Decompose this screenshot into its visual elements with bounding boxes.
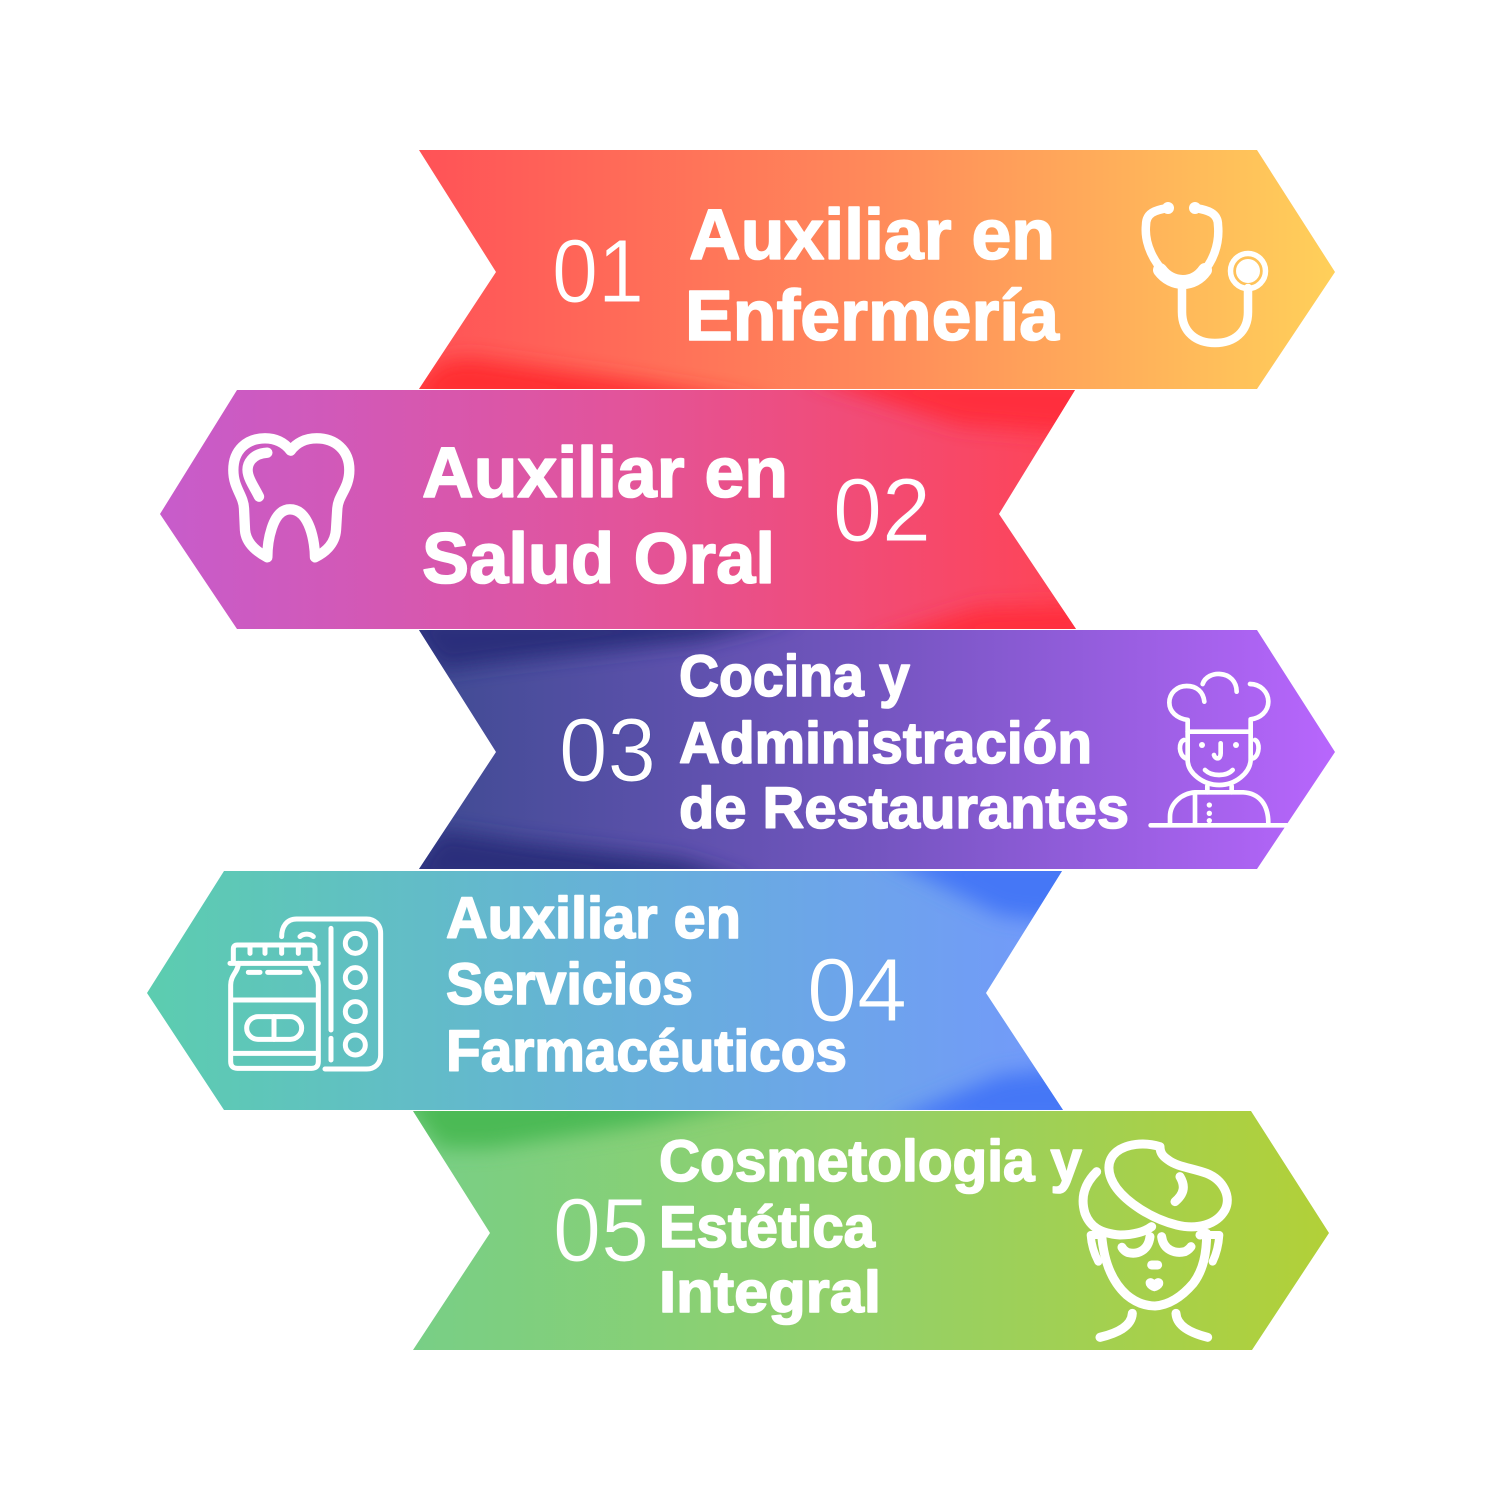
icon: chef	[1151, 674, 1287, 825]
number 04: 04	[807, 941, 907, 1041]
icon: woman face with towel	[1083, 1144, 1227, 1337]
icon: tooth	[233, 438, 349, 557]
title: Cocina y Administración de Restaurantes	[679, 644, 1129, 841]
arrow shape 1	[419, 150, 1335, 389]
title: Cosmetologia y Estética Integral: Integral	[659, 1260, 881, 1325]
title: Auxiliar en Enfermería: Auxiliar en	[689, 196, 1055, 275]
number 02: 02	[833, 461, 931, 561]
title: Cosmetologia y Estética Integral	[659, 1129, 1082, 1325]
title: Auxiliar en Servicios Farmacéuticos: Auxiliar en	[446, 886, 741, 951]
title: Auxiliar en Enfermería: Enfermería	[685, 277, 1060, 356]
title: Auxiliar en Servicios Farmacéuticos: Farmacéuticos	[446, 1019, 847, 1084]
title: Auxiliar en Salud Oral: Salud Oral	[422, 520, 775, 599]
arrow shape 2	[160, 390, 1076, 629]
banner 2: Auxiliar en Salud Oral	[160, 390, 1076, 629]
banner 1: Auxiliar en Enfermería	[400, 150, 1335, 405]
title: Cocina y Administración de Restaurantes: Administración	[679, 711, 1092, 776]
title: Cocina y Administración de Restaurantes: de Restaurantes	[679, 776, 1129, 841]
banner 4: Servicios Farmacéuticos	[147, 871, 1063, 1110]
title: Cocina y Administración de Restaurantes: Cocina y	[679, 644, 910, 709]
arrow shape 5	[413, 1111, 1329, 1350]
title: Auxiliar en Salud Oral: Auxiliar en	[422, 434, 788, 513]
arrow shape 3	[419, 630, 1335, 869]
title: Auxiliar en Enfermería	[685, 196, 1060, 356]
title: Cosmetologia y Estética Integral: Cosmetologia y	[659, 1129, 1082, 1194]
number 05: 05	[553, 1181, 649, 1281]
icon: medicine jar and blister	[230, 919, 381, 1069]
icon: stethoscope	[1146, 202, 1266, 343]
number 03: 03	[559, 701, 656, 801]
banner 3: Cocina y Administración de Restaurantes	[419, 630, 1335, 869]
title: Auxiliar en Salud Oral	[422, 434, 788, 599]
title: Cosmetologia y Estética Integral: Estética	[659, 1195, 876, 1260]
title: Auxiliar en Servicios Farmacéuticos	[446, 886, 847, 1084]
number 01: 01	[552, 222, 644, 322]
title: Auxiliar en Servicios Farmacéuticos: Servicios	[446, 952, 693, 1017]
arrow shape 4	[147, 871, 1063, 1110]
banner 5: Cosmetologia	[400, 1095, 1329, 1350]
